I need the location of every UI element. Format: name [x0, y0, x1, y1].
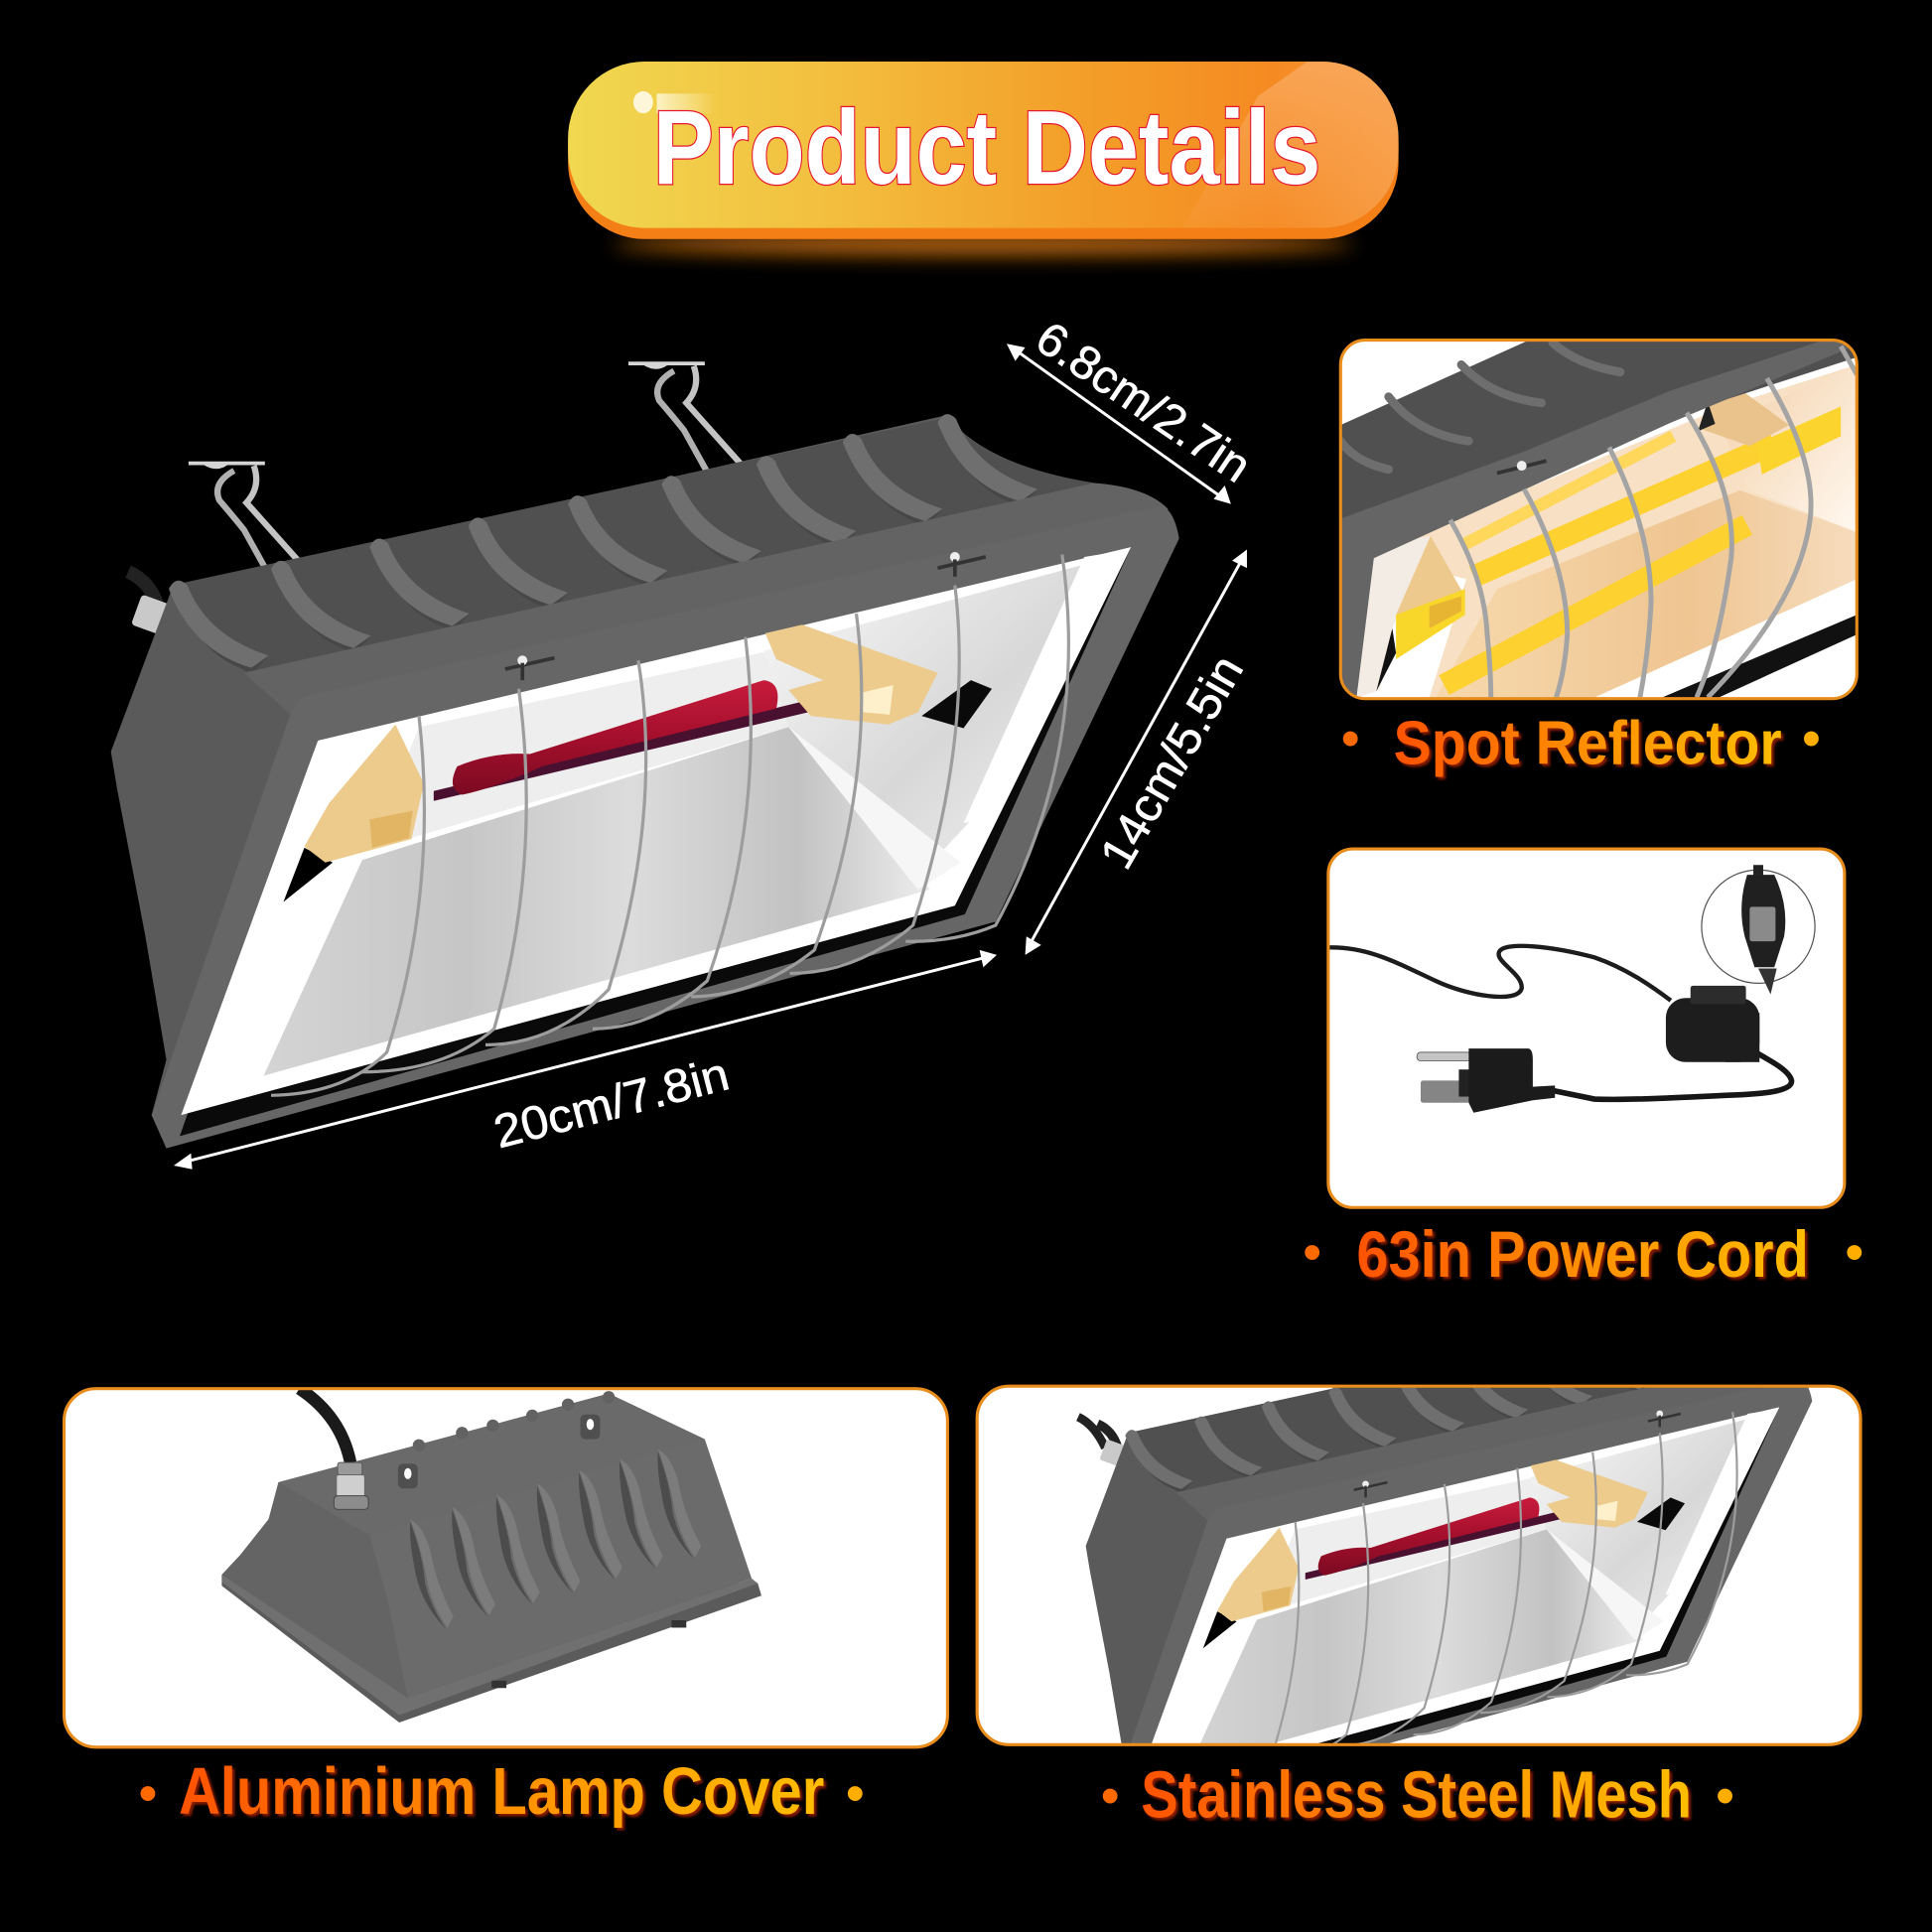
label: power cord: • — [1303, 1222, 1321, 1283]
label: aluminium lamp cover: • — [138, 1762, 157, 1823]
title: Product Details — [653, 90, 1320, 207]
left holder — [1358, 536, 1431, 697]
label: spot reflector: Spot Reflector — [1394, 709, 1782, 777]
yellow stripes — [1463, 436, 1673, 545]
dimension arrow: height 14cm — [1026, 550, 1253, 955]
heater body — [111, 414, 1179, 1149]
plug — [1417, 1052, 1471, 1061]
label: aluminium lamp cover: Aluminium Lamp Cover — [179, 1754, 824, 1829]
dimension arrow: height 14cm: 14cm/5.5in — [1089, 646, 1253, 878]
top bumps — [413, 1391, 615, 1451]
dimension arrow: width 20cm — [174, 950, 997, 1170]
label: spot reflector: • — [1802, 708, 1821, 768]
cable — [300, 1389, 351, 1466]
hanging clip right — [628, 363, 748, 475]
screw — [1497, 461, 1547, 474]
panel: stainless steel mesh — [975, 1384, 1863, 1746]
panel: aluminium lamp cover — [65, 1389, 947, 1747]
housing — [221, 1394, 752, 1698]
main heater product image — [111, 363, 1179, 1149]
dimension arrow: depth 6.8cm: 6.8cm/2.7in — [1027, 311, 1261, 492]
label: aluminium lamp cover: • — [846, 1762, 865, 1823]
cord — [1328, 946, 1671, 1001]
inline switch box — [1666, 998, 1759, 1062]
wires — [1450, 346, 1857, 697]
cable gland — [334, 1462, 368, 1509]
mounting tabs — [398, 1463, 418, 1488]
label: stainless steel mesh: Stainless Steel Mesh — [1141, 1758, 1692, 1833]
label: stainless steel mesh: • — [1716, 1765, 1734, 1826]
label: power cord: 63in Power Cord — [1356, 1217, 1809, 1291]
reflector surfaces — [1418, 365, 1855, 697]
title — [568, 62, 1399, 255]
dimension arrow: width 20cm: 20cm/7.8in — [488, 1046, 734, 1158]
hanging clip left — [189, 464, 308, 574]
base plate — [221, 1575, 761, 1723]
switch detail inset — [1702, 870, 1815, 983]
panel: spot reflector — [1340, 341, 1857, 699]
frame and fins — [1340, 341, 1857, 523]
label: stainless steel mesh: • — [1101, 1765, 1120, 1826]
label: spot reflector: • — [1341, 708, 1360, 768]
panel: power cord — [1328, 849, 1845, 1207]
label: power cord: • — [1845, 1222, 1863, 1283]
screws — [491, 1681, 506, 1688]
right holder — [1757, 407, 1841, 475]
ribs — [410, 1519, 454, 1629]
